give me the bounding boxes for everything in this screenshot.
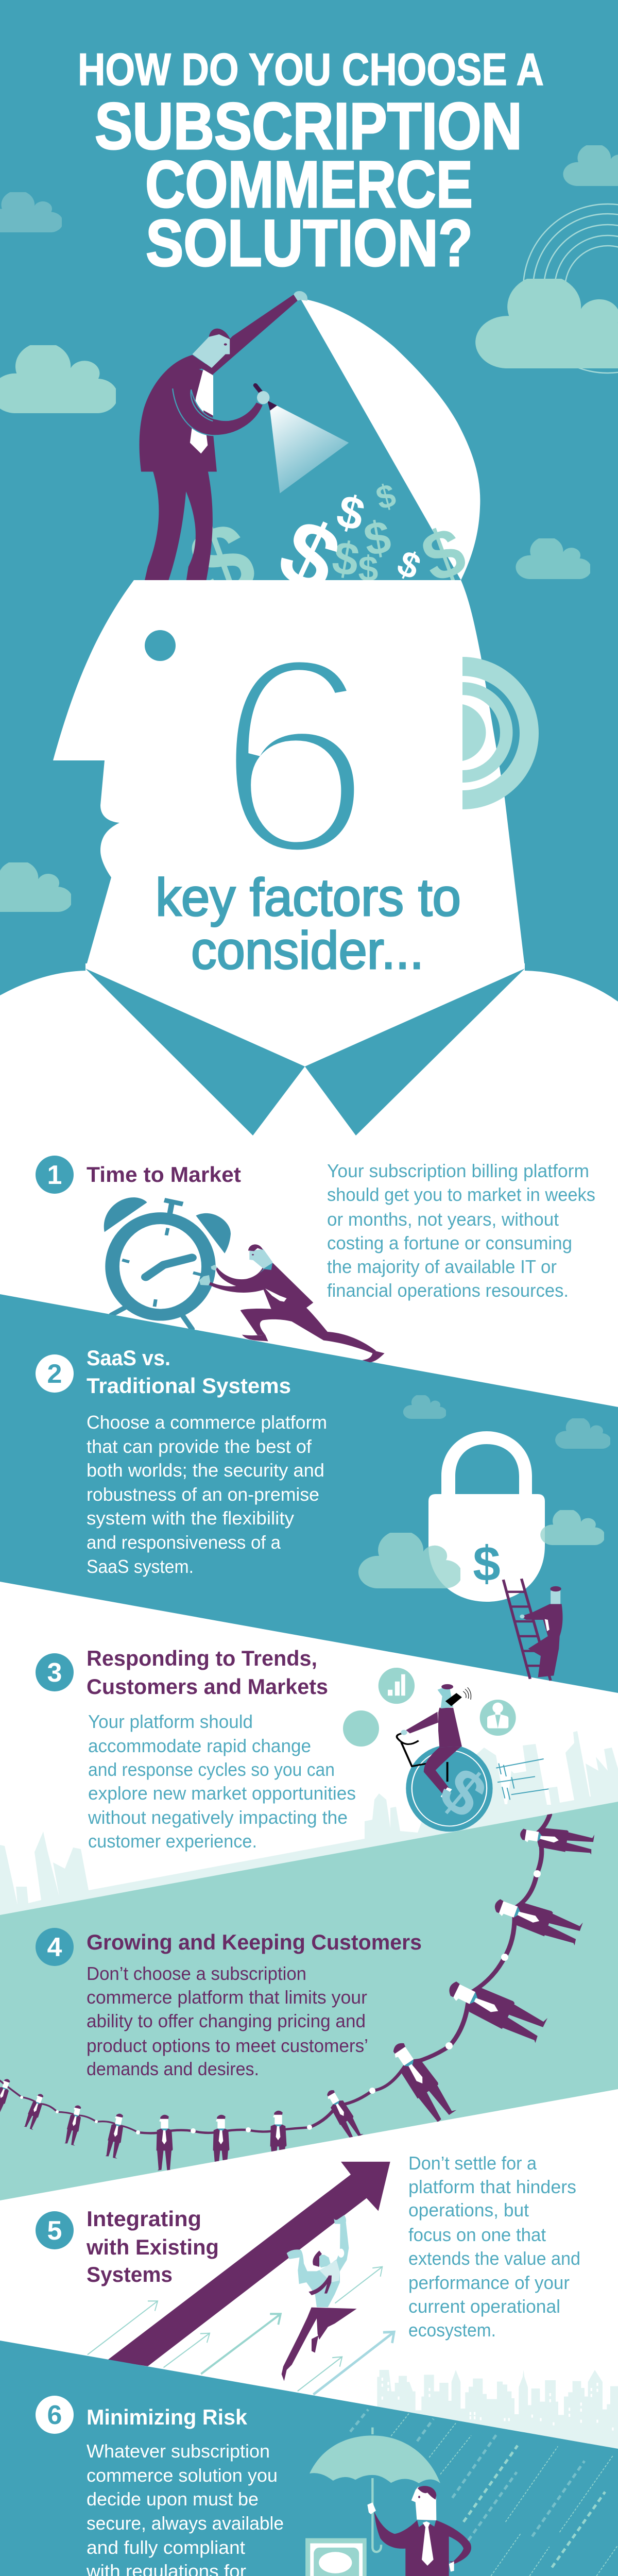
section 4 panel: growing and keeping customers bbox=[36, 1928, 422, 2079]
coin wheel with cyclist bbox=[397, 1684, 493, 1832]
paragraph 4: ability to offer changing pricing and bbox=[87, 2010, 366, 2031]
head silhouette bbox=[53, 580, 525, 969]
paragraph 4: commerce platform that limits your bbox=[87, 1987, 367, 2008]
badge 1: 1 bbox=[47, 1160, 62, 1190]
cloud: section 2 small bbox=[403, 1394, 447, 1419]
paragraph 1 bbox=[327, 1160, 595, 1301]
paragraph 3: accommodate rapid change bbox=[88, 1735, 311, 1756]
paragraph 2: SaaS system. bbox=[87, 1556, 194, 1577]
open skull lid bbox=[300, 298, 480, 580]
ladder and climbing businessman bbox=[503, 1579, 563, 1681]
paragraph 5: platform that hinders bbox=[408, 2176, 576, 2197]
section 6 panel: minimizing risk bbox=[36, 2396, 284, 2576]
heading 5 bbox=[86, 2207, 219, 2286]
paragraph 2 bbox=[87, 1412, 327, 1577]
padlock with dollar sign: $ bbox=[473, 1536, 501, 1591]
padlock with dollar sign bbox=[428, 1431, 545, 1602]
section 6 teal band bbox=[0, 2341, 618, 2576]
ear rings bbox=[462, 657, 539, 809]
businessman under umbrella bbox=[310, 2428, 471, 2576]
heading 5: with Existing bbox=[86, 2235, 219, 2259]
cloud: section 2 right bbox=[555, 1417, 611, 1449]
cloud: over padlock right bbox=[540, 1509, 605, 1545]
title: SOLUTION? bbox=[146, 207, 473, 280]
dollar signs inside the head: $ bbox=[372, 476, 400, 517]
title: COMMERCE bbox=[145, 148, 473, 222]
cloud: upper right bbox=[563, 144, 618, 186]
paragraph 5: performance of your bbox=[408, 2272, 570, 2293]
shirt collar bbox=[85, 969, 525, 1136]
paragraph 5 bbox=[408, 2153, 580, 2341]
jumping businessman holding arrow bbox=[282, 2215, 357, 2381]
paragraph 3: without negatively impacting the bbox=[88, 1807, 348, 1828]
businessman pushing clock bbox=[199, 1244, 385, 1362]
paragraph 5: ecosystem. bbox=[408, 2319, 496, 2341]
dollar bill bbox=[305, 2538, 367, 2576]
dollar sign on coin: $ bbox=[426, 1754, 500, 1832]
icon: empty bubble bbox=[343, 1710, 379, 1747]
badge 6 bbox=[36, 2396, 74, 2434]
alarm clock bbox=[104, 1197, 231, 1329]
paragraph 6 bbox=[86, 2441, 284, 2576]
paragraph 2: Choose a commerce platform bbox=[87, 1412, 327, 1433]
badge 5 bbox=[36, 2211, 74, 2249]
subtitle: key factors to consider bbox=[156, 868, 461, 980]
badge 4 bbox=[36, 1928, 74, 1966]
paragraph 1: costing a fortune or consuming bbox=[327, 1232, 572, 1253]
rain streaks bbox=[350, 2410, 618, 2576]
badge 3: 3 bbox=[47, 1658, 62, 1688]
paragraph 1: Your subscription billing platform bbox=[327, 1160, 589, 1181]
dollar signs inside the head: $ bbox=[176, 498, 269, 625]
cloud: over padlock left bbox=[358, 1531, 462, 1588]
icon: bar chart bubble bbox=[379, 1668, 415, 1704]
dollar signs inside the head: $ bbox=[332, 485, 370, 541]
paragraph 2: both worlds; the security and bbox=[87, 1460, 324, 1481]
paragraph 2: robustness of an on-premise bbox=[87, 1484, 319, 1505]
paragraph 6: secure, always available bbox=[87, 2513, 284, 2534]
chain of linked businessmen bbox=[0, 1815, 594, 2171]
dollar signs inside the head: $ bbox=[391, 543, 426, 587]
badge 1 bbox=[36, 1156, 74, 1194]
hero teal background bbox=[0, 0, 618, 1030]
dollar signs inside the head: $ bbox=[264, 498, 355, 614]
heading 3: Responding to Trends, bbox=[87, 1646, 317, 1670]
large number six: 6 bbox=[216, 598, 372, 913]
badge 2 bbox=[36, 1354, 74, 1393]
paragraph 6: decide upon must be bbox=[87, 2488, 259, 2510]
dollar signs inside the head: $ bbox=[412, 512, 475, 598]
heading 3: Customers and Markets bbox=[87, 1674, 328, 1699]
dollar signs inside the head: $ bbox=[358, 549, 378, 589]
heading 2: Traditional Systems bbox=[87, 1374, 291, 1398]
paragraph 1: the majority of available IT or bbox=[327, 1256, 557, 1277]
heading 6: Minimizing Risk bbox=[87, 2405, 248, 2429]
paragraph 3: Your platform should bbox=[88, 1711, 253, 1732]
heading 5: Integrating bbox=[87, 2207, 201, 2231]
title: HOW DO YOU CHOOSE A bbox=[78, 44, 544, 95]
paragraph 5: focus on one that bbox=[408, 2224, 546, 2245]
shoulders bbox=[0, 963, 618, 1136]
title bbox=[78, 44, 544, 280]
section 2 teal slanted band bbox=[0, 1294, 618, 1693]
paragraph 6: Whatever subscription bbox=[87, 2441, 270, 2462]
paragraph 4 bbox=[87, 1963, 368, 2079]
paragraph 1: should get you to market in weeks bbox=[327, 1184, 595, 1205]
badge 5: 5 bbox=[47, 2216, 62, 2246]
paragraph 4: product options to meet customers’ bbox=[87, 2035, 368, 2056]
cloud: large right bbox=[475, 275, 618, 368]
paragraph 2: system with the flexibility bbox=[87, 1507, 294, 1529]
badge 4: 4 bbox=[47, 1933, 62, 1962]
businessman lifting lid with flashlight bbox=[140, 291, 349, 592]
paragraph 3: customer experience. bbox=[88, 1831, 257, 1852]
dollar signs inside the head bbox=[176, 476, 475, 625]
heading 3 bbox=[87, 1646, 328, 1699]
city skyline: section 5 bbox=[377, 2370, 618, 2451]
cloud: upper left bbox=[0, 191, 63, 232]
paragraph 3 bbox=[88, 1711, 356, 1852]
icon: person bubble bbox=[480, 1700, 516, 1736]
subtitle: key factors to consider: consider... bbox=[191, 921, 424, 980]
cloud: lower right bbox=[516, 537, 591, 579]
heading 2 bbox=[87, 1346, 291, 1398]
paragraph 4: demands and desires. bbox=[87, 2058, 259, 2079]
heading 4: Growing and Keeping Customers bbox=[87, 1930, 422, 1954]
paragraph 3: and response cycles so you can bbox=[88, 1759, 335, 1780]
thin rising arrows bbox=[88, 2267, 394, 2395]
paragraph 2: and responsiveness of a bbox=[87, 1532, 281, 1553]
cloud: neck left bbox=[0, 860, 73, 912]
section 2 panel: saas vs traditional bbox=[36, 1346, 327, 1577]
badge 2: 2 bbox=[47, 1359, 62, 1389]
paragraph 1: or months, not years, without bbox=[327, 1209, 559, 1230]
heading 2: SaaS vs. bbox=[87, 1346, 170, 1370]
paragraph 3: explore new market opportunities bbox=[88, 1783, 356, 1804]
paragraph 5: operations, but bbox=[408, 2199, 529, 2221]
title: SUBSCRIPTION bbox=[95, 90, 522, 163]
city skyline: section 3 bbox=[0, 1731, 618, 1915]
badge 6: 6 bbox=[47, 2400, 62, 2430]
paragraph 5: current operational bbox=[408, 2296, 560, 2317]
paragraph 6: and fully compliant bbox=[87, 2537, 245, 2558]
subtitle: key factors to consider: key factors to bbox=[156, 868, 461, 927]
cloud: large left bbox=[0, 343, 118, 413]
decorative rainbow arcs bbox=[523, 204, 618, 373]
dollar signs inside the head: $ bbox=[329, 532, 363, 587]
paragraph 6: commerce solution you bbox=[87, 2465, 278, 2486]
section 5 panel: integrating with existing systems bbox=[36, 2153, 580, 2341]
dollar signs inside the head: $ bbox=[360, 511, 394, 566]
section 4 mint slanted band bbox=[0, 1802, 618, 2200]
paragraph 5: extends the value and bbox=[408, 2248, 580, 2269]
paragraph 1: financial operations resources. bbox=[327, 1280, 569, 1301]
section 1 panel: time to market bbox=[36, 1156, 595, 1301]
big purple growth arrow bbox=[107, 2162, 390, 2366]
badge 3 bbox=[36, 1653, 74, 1691]
paragraph 4: Don’t choose a subscription bbox=[87, 1963, 306, 1984]
heading 5: Systems bbox=[87, 2262, 173, 2286]
paragraph 2: that can provide the best of bbox=[87, 1436, 312, 1457]
heading 1: Time to Market bbox=[87, 1162, 241, 1187]
speed lines bbox=[496, 1759, 548, 1800]
eye bbox=[145, 630, 176, 661]
section 3 panel: responding to trends bbox=[36, 1646, 356, 1852]
paragraph 5: Don’t settle for a bbox=[408, 2153, 537, 2174]
